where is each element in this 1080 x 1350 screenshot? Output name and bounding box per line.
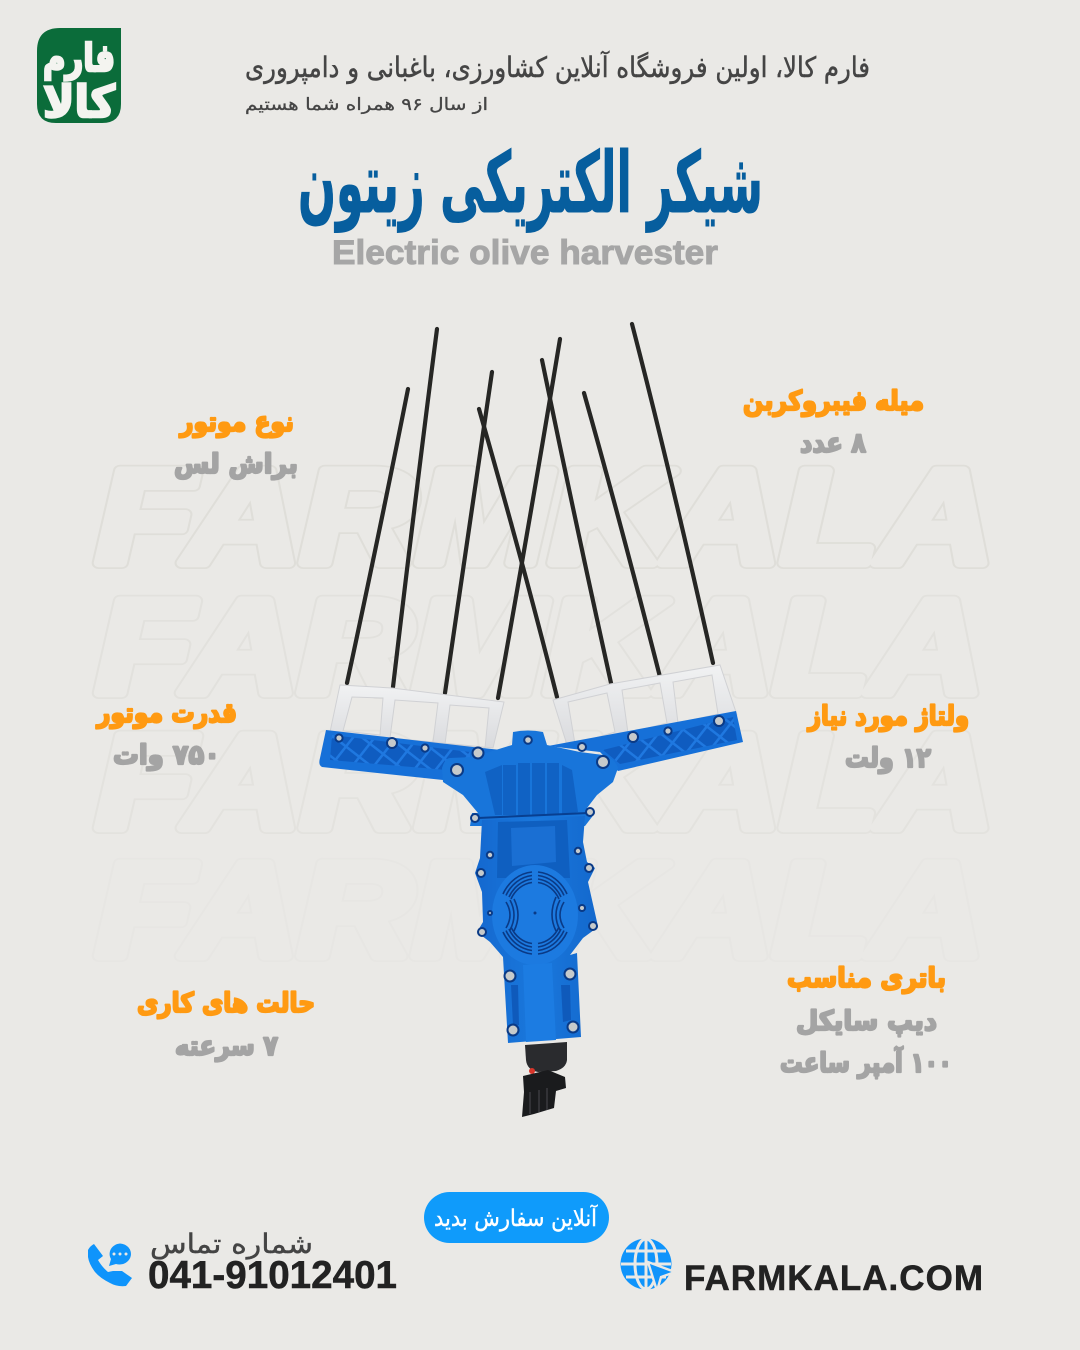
spec: motor power: ‏۷۵۰ وات xyxy=(113,740,220,771)
lower housing channels xyxy=(511,985,571,1025)
left arm xyxy=(319,730,510,780)
contact label: شماره تماس xyxy=(150,1229,313,1260)
website: FARMKALA.COM xyxy=(684,1259,983,1298)
order button xyxy=(424,1192,609,1243)
housing seam xyxy=(478,813,588,818)
logo xyxy=(37,28,121,128)
right arm xyxy=(548,711,743,771)
motor end cap xyxy=(525,1042,567,1072)
watermark: FARMKALA rows xyxy=(96,443,994,985)
watermark: FARMKALA rows: FARMKALA xyxy=(96,443,994,592)
spec: rods: ‏۸ عدد xyxy=(800,428,866,459)
order button: آنلاین سفارش بدید xyxy=(434,1204,598,1232)
spec: work modes: ‏۷ سرعته xyxy=(175,1031,278,1062)
product: olive harvester xyxy=(319,324,743,1117)
english subtitle: Electric olive harvester xyxy=(332,234,718,272)
spec: voltage xyxy=(806,701,969,774)
logo: فارم xyxy=(43,36,115,81)
spec: battery: باتری مناسب xyxy=(787,963,946,994)
watermark: FARMKALA rows: FARMKALA xyxy=(96,573,984,722)
spec: motor power xyxy=(95,698,237,771)
spec: rods: میله فیبروکربن xyxy=(743,386,924,417)
icon: phone with chat bubble xyxy=(88,1244,132,1286)
cooling ribs xyxy=(485,763,578,815)
watermark: FARMKALA rows: FARMKALA xyxy=(96,708,994,857)
watermark: FARMKALA rows: FARMKALA xyxy=(96,836,984,985)
spec: battery xyxy=(780,963,952,1079)
spec: battery: ‏۱۰۰ آمپر ساعت xyxy=(780,1046,952,1079)
watermark: FARMKALA rows: FARMKALA xyxy=(96,836,984,985)
spec: work modes xyxy=(137,988,315,1062)
spec: voltage: ‏۱۲ ولت xyxy=(845,743,931,774)
header tagline: فارم کالا، اولین فروشگاه آنلاین کشاورزی، باغبانی و دامپروری xyxy=(245,51,870,84)
watermark: FARMKALA rows: FARMKALA xyxy=(96,708,994,857)
housing recess xyxy=(497,820,570,878)
fiberglass rods xyxy=(347,324,713,698)
logo: کالا xyxy=(43,77,115,128)
header subline: از سال ۹۶ همراه شما هستیم xyxy=(245,95,488,115)
watermark: FARMKALA rows: FARMKALA xyxy=(96,573,984,722)
electrical connector xyxy=(522,1068,566,1117)
icon: globe with cursor xyxy=(620,1238,675,1291)
motor housing xyxy=(475,816,598,1043)
spec: voltage: ولتاژ مورد نیاز xyxy=(806,701,969,732)
spec: rods xyxy=(743,386,924,459)
spec: motor type: براش لس xyxy=(174,449,298,480)
white rod holders xyxy=(330,665,737,748)
motor cap xyxy=(492,865,578,965)
spec: motor power: قدرت موتور xyxy=(95,698,237,729)
gear head xyxy=(442,730,618,826)
spec: battery: دیپ سایکل xyxy=(796,1006,937,1037)
spec: motor type xyxy=(174,407,298,480)
spec: motor type: نوع موتور xyxy=(178,407,294,438)
spec: work modes: حالت های کاری xyxy=(137,988,315,1019)
watermark: FARMKALA rows: FARMKALA xyxy=(96,443,994,592)
phone number: 041-91012401 xyxy=(148,1254,397,1297)
bolts xyxy=(335,716,724,1036)
